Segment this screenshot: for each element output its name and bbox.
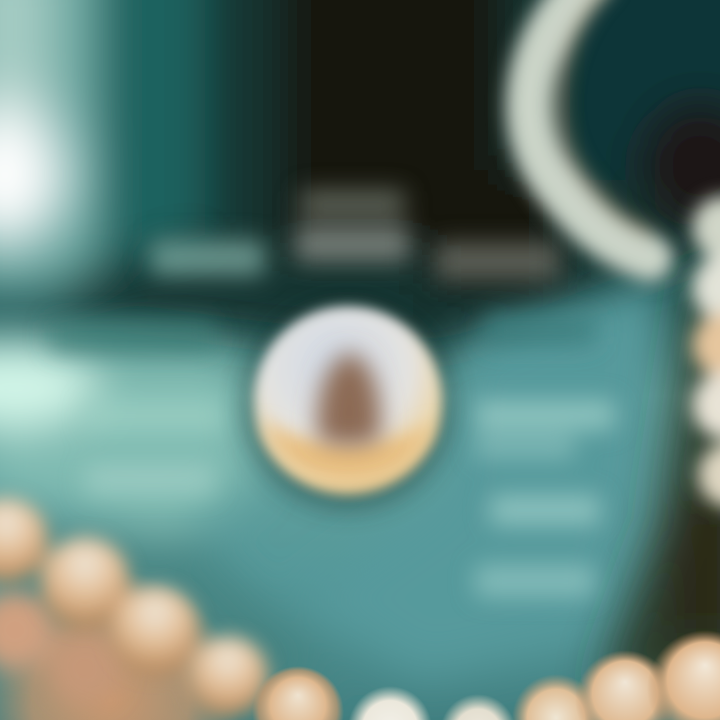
blurred text blocks — [50, 190, 615, 597]
brown centre motif — [317, 352, 381, 446]
under-chain tan mass — [0, 570, 250, 720]
bottom-left pearl chain — [0, 498, 346, 720]
left text column — [50, 320, 225, 495]
glow: top-left light — [0, 0, 70, 250]
dark upper backdrop — [0, 0, 720, 355]
pearl ring upper right — [529, 0, 650, 258]
pearl shadow — [242, 299, 454, 511]
bottom-right pearl chain — [348, 630, 720, 720]
pearl beads — [0, 498, 268, 716]
right pearl column — [692, 196, 720, 507]
dark lower-right corner — [600, 260, 720, 690]
right text column — [475, 315, 615, 597]
pearl body — [254, 306, 442, 494]
central pearl — [242, 299, 454, 511]
under-chain left blend — [0, 590, 121, 704]
last bead — [250, 665, 346, 720]
light teal lower band — [0, 275, 665, 710]
heading text top row — [150, 190, 560, 280]
lower golden crescent — [262, 420, 434, 480]
